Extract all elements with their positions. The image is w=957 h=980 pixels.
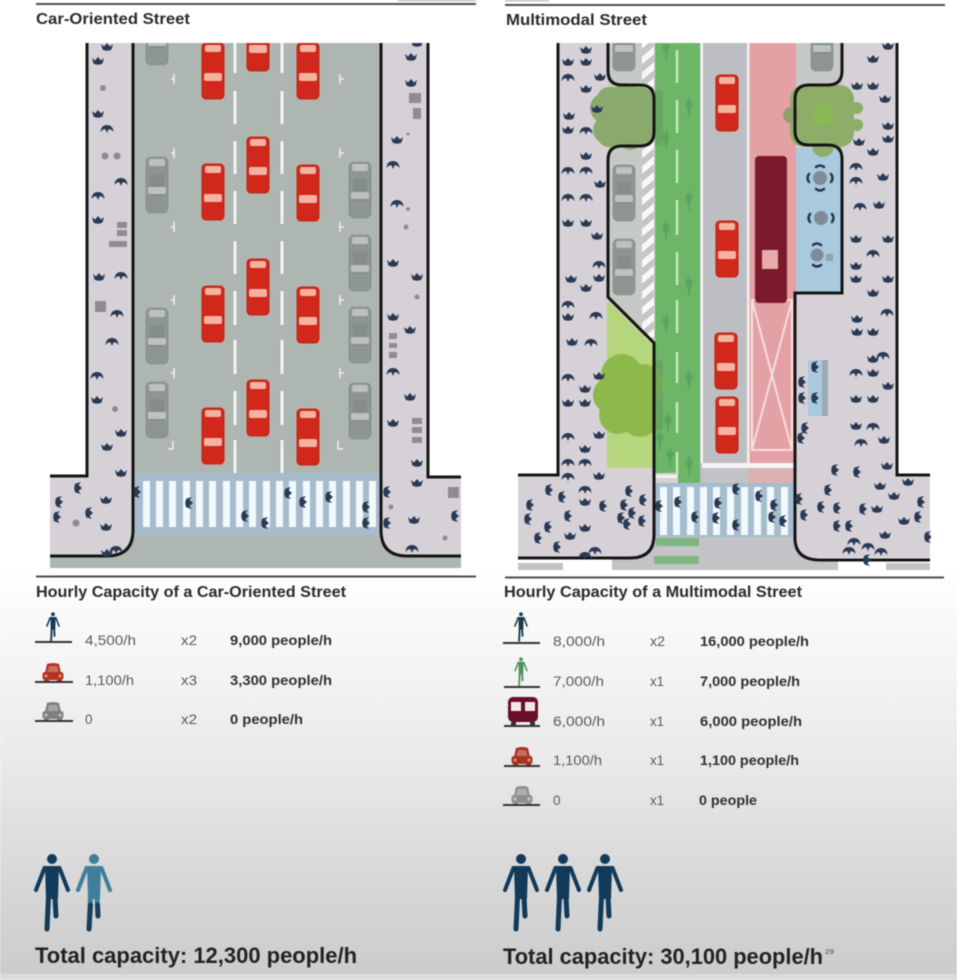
bus lane bbox=[702, 43, 796, 483]
bike symbols bbox=[656, 41, 693, 475]
heading: Multimodal Street: Multimodal Street bbox=[506, 12, 647, 29]
capacity table: car-oriented bbox=[35, 576, 476, 727]
row: parked cars: 0 people bbox=[699, 793, 758, 808]
total text: Total capacity: 30,100 people/h bbox=[503, 944, 823, 969]
row: pedestrians: 9,000 people/h bbox=[230, 633, 332, 648]
row: bus: 6,000/h bbox=[553, 714, 605, 729]
lane markings bbox=[168, 43, 344, 473]
bench bbox=[808, 360, 828, 416]
row: cyclists: 7,000/h bbox=[553, 674, 604, 689]
row: parked cars: 0 bbox=[553, 793, 561, 808]
sidewalks bbox=[518, 43, 930, 558]
crosswalk bbox=[655, 483, 795, 537]
bike lane bbox=[654, 43, 700, 564]
row: pedestrians: x2 bbox=[181, 633, 197, 648]
row: parked cars: 0 bbox=[85, 712, 93, 727]
icon: bus bbox=[508, 697, 538, 725]
parked cars bbox=[146, 9, 371, 439]
red cars bbox=[714, 74, 739, 454]
roadway bottom bbox=[518, 537, 930, 570]
roadway bbox=[50, 43, 461, 568]
table heading: Hourly Capacity of a Multimodal Street bbox=[504, 584, 802, 601]
heading: Car-Oriented Street: Car-Oriented Street bbox=[36, 11, 190, 28]
cafe tables bbox=[808, 166, 834, 266]
street plan: multimodal bbox=[518, 15, 932, 570]
footnote mark: 29 bbox=[825, 949, 834, 956]
row: pedestrians: 4,500/h bbox=[85, 633, 136, 648]
row: parked cars bbox=[35, 702, 303, 727]
cafe zone bbox=[796, 148, 842, 293]
left parking bay and hatched buffer bbox=[608, 43, 654, 343]
row: bus bbox=[504, 697, 802, 729]
table heading: Hourly Capacity of a Car-Oriented Street bbox=[36, 584, 346, 601]
right parking bay bbox=[796, 43, 842, 88]
total capacity: car-oriented bbox=[35, 854, 357, 968]
planted strip bbox=[607, 300, 653, 468]
row: parked cars bbox=[503, 786, 758, 808]
total text: Total capacity: 12,300 people/h bbox=[35, 943, 357, 968]
row: pedestrians: x2 bbox=[650, 634, 665, 649]
moving cars bbox=[201, 14, 320, 466]
crosswalk bbox=[134, 473, 381, 535]
row: pedestrians bbox=[503, 612, 809, 649]
row: bus: 6,000 people/h bbox=[700, 714, 802, 729]
parked cars bbox=[613, 15, 833, 295]
row: moving cars: 3,300 people/h bbox=[230, 673, 332, 688]
row: parked cars: x1 bbox=[650, 793, 664, 808]
street plan: car-oriented bbox=[50, 9, 461, 568]
row: moving cars: x1 bbox=[650, 753, 664, 768]
row: parked cars: 0 people/h bbox=[230, 712, 303, 727]
row: bus: x1 bbox=[650, 714, 664, 729]
row: moving cars: 1,100/h bbox=[85, 673, 134, 688]
trees bbox=[590, 83, 863, 437]
street furniture bbox=[72, 85, 459, 540]
row: moving cars bbox=[504, 747, 799, 768]
row: pedestrians bbox=[35, 612, 332, 648]
row: moving cars bbox=[35, 663, 332, 688]
total capacity: multimodal bbox=[503, 854, 834, 969]
row: pedestrians: 16,000 people/h bbox=[700, 634, 809, 649]
bus bbox=[755, 156, 787, 303]
row: moving cars: x3 bbox=[181, 673, 197, 688]
row: cyclists: x1 bbox=[650, 674, 664, 689]
capacity table: multimodal bbox=[503, 576, 944, 808]
sidewalks bbox=[50, 43, 461, 556]
row: cyclists: 7,000 people/h bbox=[700, 674, 800, 689]
pedestrians bbox=[524, 42, 932, 566]
curbs bbox=[50, 43, 461, 556]
row: parked cars: x2 bbox=[181, 712, 197, 727]
row: moving cars: 1,100/h bbox=[553, 753, 602, 768]
row: moving cars: 1,100 people/h bbox=[700, 753, 799, 768]
curbs bbox=[518, 43, 930, 560]
row: pedestrians: 8,000/h bbox=[553, 634, 605, 649]
general traffic lane bbox=[700, 43, 750, 483]
icon: people bbox=[505, 854, 621, 929]
row: cyclists bbox=[504, 657, 800, 689]
icon: people bbox=[36, 854, 110, 929]
pedestrians bbox=[53, 39, 459, 557]
